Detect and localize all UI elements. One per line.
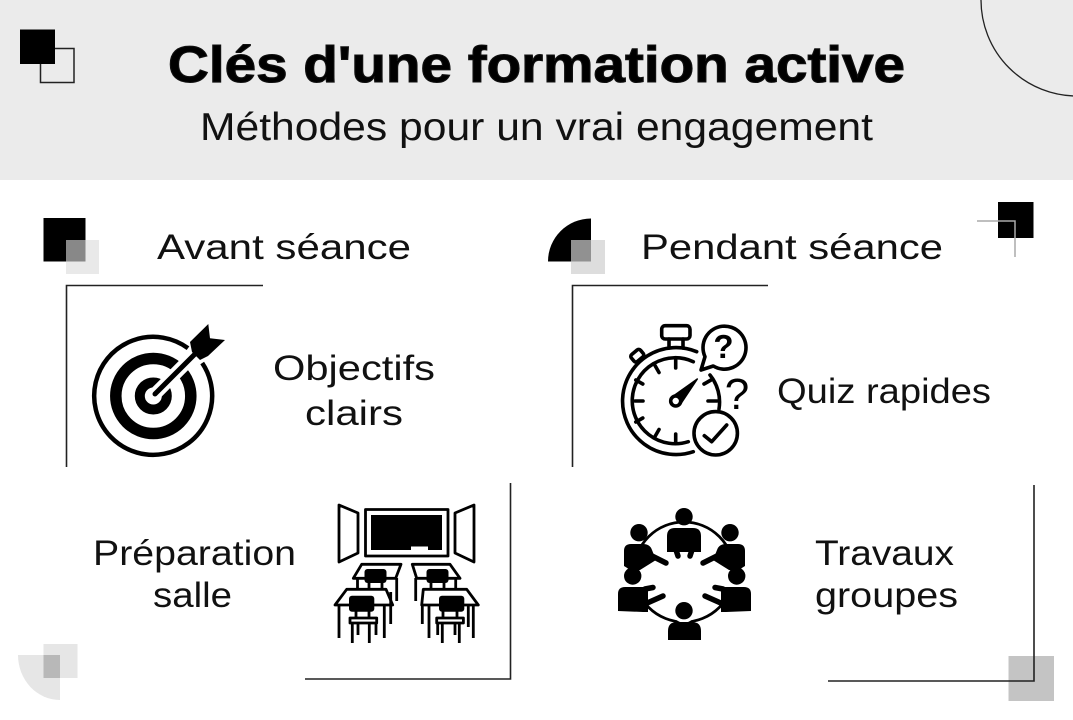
decoration: bottom right square <box>1008 656 1054 701</box>
label: préparation salle: Préparation <box>93 534 296 573</box>
label: travaux groupes <box>815 534 958 615</box>
frame: objectifs <box>66 286 263 467</box>
section icon: pendant <box>548 218 605 274</box>
frame: quiz <box>572 286 768 467</box>
label: préparation salle <box>93 534 296 615</box>
decoration: top right square <box>977 202 1034 257</box>
title: Clés d'une formation active <box>168 36 905 93</box>
icon: classroom <box>335 505 478 643</box>
label: quiz rapides: Quiz rapides <box>777 372 991 411</box>
icon: target with arrow <box>94 324 225 455</box>
icon: stopwatch with questions: ? <box>713 328 734 365</box>
section heading: pendant: Pendant séance <box>641 228 943 267</box>
icon: stopwatch with questions: ? <box>725 370 749 419</box>
icon: people round table <box>612 508 756 640</box>
section heading: avant: Avant séance <box>157 228 411 267</box>
icon: stopwatch with questions <box>623 326 749 455</box>
label: objectifs clairs: clairs <box>305 394 403 433</box>
frame: préparation <box>305 483 510 679</box>
logo squares <box>20 30 74 82</box>
section icon: avant <box>44 218 99 274</box>
label: travaux groupes: Travaux <box>815 534 955 573</box>
subtitle: Méthodes pour un vrai engagement <box>200 106 873 149</box>
header band <box>0 0 1073 180</box>
frame: travaux <box>828 485 1034 681</box>
decoration: bottom left shapes <box>18 644 78 700</box>
label: objectifs clairs: Objectifs <box>273 349 435 388</box>
label: préparation salle: salle <box>153 576 232 615</box>
label: travaux groupes: groupes <box>815 576 958 615</box>
label: objectifs clairs <box>273 349 435 433</box>
